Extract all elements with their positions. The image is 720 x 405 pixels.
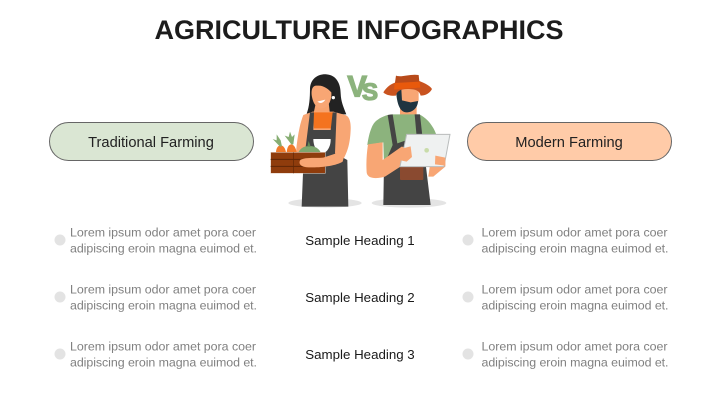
icon: VS mark: V bbox=[347, 70, 367, 103]
row 2 right text: adipiscing eroin magna euimod et. bbox=[482, 298, 668, 312]
title: AGRICULTURE INFOGRAPHICS bbox=[154, 15, 564, 45]
row 1 right text: adipiscing eroin magna euimod et. bbox=[482, 242, 668, 256]
row 1 right text: Lorem ipsum odor amet pora coer bbox=[482, 226, 668, 240]
row 3 left text: Lorem ipsum odor amet pora coer bbox=[70, 340, 256, 354]
row 3 right text bbox=[462, 340, 668, 370]
icon: man farmer with tablet bbox=[366, 75, 450, 208]
row 3 left text bbox=[54, 340, 257, 370]
pill: Modern Farming bbox=[468, 122, 672, 160]
pill: Modern Farming: Modern Farming bbox=[515, 135, 623, 151]
row 1 left text: Lorem ipsum odor amet pora coer bbox=[70, 226, 256, 240]
row 1 left text: adipiscing eroin magna euimod et. bbox=[70, 242, 257, 256]
row 2 right text: Lorem ipsum odor amet pora coer bbox=[482, 282, 668, 296]
pill: Traditional Farming: Traditional Farming bbox=[88, 135, 214, 151]
row 2 left text: Lorem ipsum odor amet pora coer bbox=[70, 282, 256, 296]
pill: Traditional Farming bbox=[50, 122, 254, 160]
row 2 left text bbox=[54, 282, 257, 312]
icon: woman farmer with crate bbox=[271, 74, 362, 208]
row 1 left text bbox=[54, 226, 257, 256]
row 3 right text: adipiscing eroin magna euimod et. bbox=[482, 356, 668, 370]
icon: VS mark: S bbox=[362, 79, 378, 106]
row 3 heading: Sample Heading 3 bbox=[305, 347, 415, 362]
row 2 heading: Sample Heading 2 bbox=[305, 290, 415, 305]
row 3 right text: Lorem ipsum odor amet pora coer bbox=[482, 340, 668, 354]
row 3 left text: adipiscing eroin magna euimod et. bbox=[70, 356, 257, 370]
row 2 right text bbox=[462, 282, 668, 312]
illustration: farmers bbox=[271, 70, 450, 208]
row 1 right text bbox=[462, 226, 668, 256]
row 1 heading: Sample Heading 1 bbox=[305, 233, 415, 248]
row 2 left text: adipiscing eroin magna euimod et. bbox=[70, 298, 257, 312]
